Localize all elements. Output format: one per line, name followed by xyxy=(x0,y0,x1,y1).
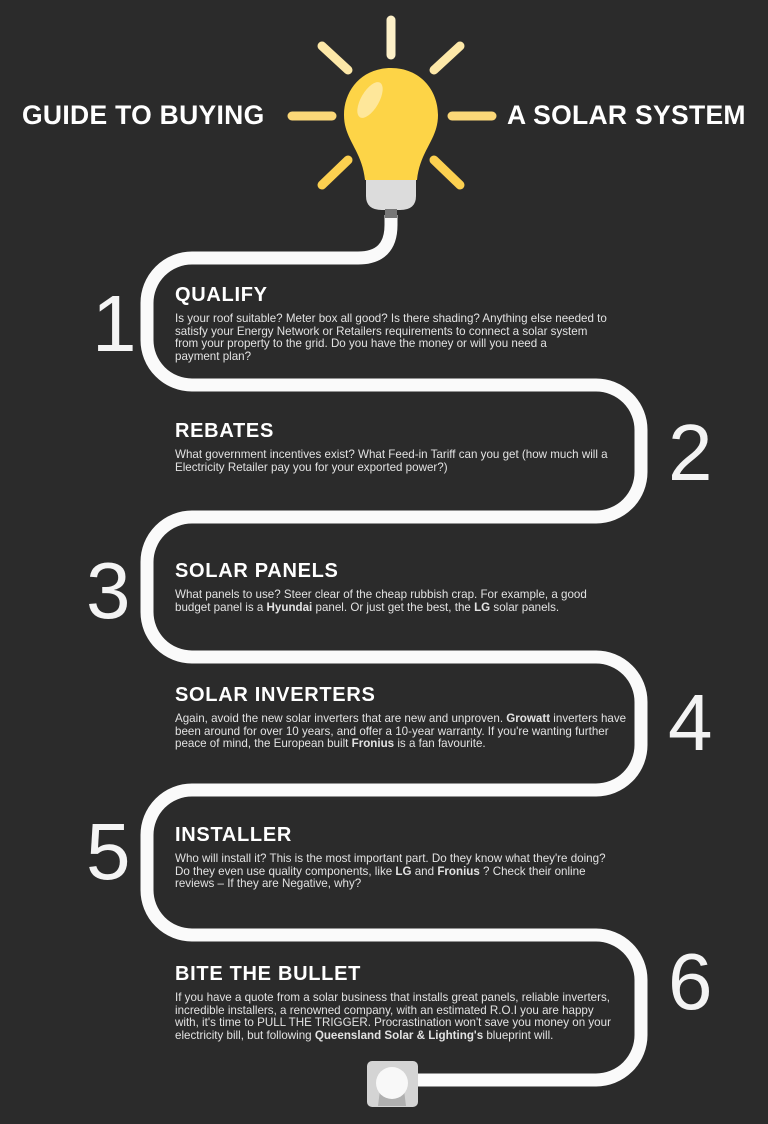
text: 3 xyxy=(86,546,130,635)
text: Who will install it? This is the most important part. Do they know what they're doing? xyxy=(175,852,606,865)
text: electricity bill, but following Queensland Solar & Lighting's blueprint will. xyxy=(175,1029,553,1042)
text: Again, avoid the new solar inverters that are new and unproven. Growatt inverters have xyxy=(175,712,626,725)
step numbers: 1 xyxy=(92,279,136,368)
text: satisfy your Energy Network or Retailers requirements to connect a solar system xyxy=(175,325,587,338)
text: payment plan? xyxy=(175,350,251,363)
text: What government incentives exist? What Feed-in Tariff can you get (how much will a xyxy=(175,448,608,461)
text: peace of mind, the European built Fronius is a fan favourite. xyxy=(175,737,486,750)
text: 2 xyxy=(668,408,712,497)
text: been around for over 10 years, and offer a 10-year warranty. If you're wanting further xyxy=(175,725,609,738)
text: reviews – If they are Negative, why? xyxy=(175,877,361,890)
step 4: SOLAR INVERTERS xyxy=(175,684,376,706)
step 3: SOLAR PANELS xyxy=(175,560,339,582)
step 6: BITE THE BULLET xyxy=(175,963,361,985)
text: Is your roof suitable? Meter box all good? Is there shading? Anything else needed to xyxy=(175,312,607,325)
text: budget panel is a Hyundai panel. Or just get the best, the LG solar panels. xyxy=(175,601,559,614)
text: 5 xyxy=(86,807,130,896)
text: 6 xyxy=(668,937,712,1026)
text: from your property to the grid. Do you have the money or will you need a xyxy=(175,337,547,350)
text: with, it's time to PULL THE TRIGGER. Procrastination won't save you money on your xyxy=(175,1016,611,1029)
text: What panels to use? Steer clear of the cheap rubbish crap. For example, a good xyxy=(175,588,587,601)
step 1: QUALIFY xyxy=(175,284,268,306)
text: 4 xyxy=(668,678,712,767)
step 2: REBATES xyxy=(175,420,274,442)
text: A SOLAR SYSTEM xyxy=(507,100,746,130)
text: If you have a quote from a solar business that installs great panels, reliable inverters, xyxy=(175,991,610,1004)
title: GUIDE TO BUYING xyxy=(22,100,265,130)
icon: light bulb xyxy=(288,16,496,218)
text: Do they even use quality components, like LG and Fronius ? Check their online xyxy=(175,865,586,878)
text: Electricity Retailer pay you for your exported power?) xyxy=(175,461,448,474)
text: incredible installers, a renowned company, with an estimated R.O.I you are happy xyxy=(175,1004,594,1017)
step 5: INSTALLER xyxy=(175,824,292,846)
